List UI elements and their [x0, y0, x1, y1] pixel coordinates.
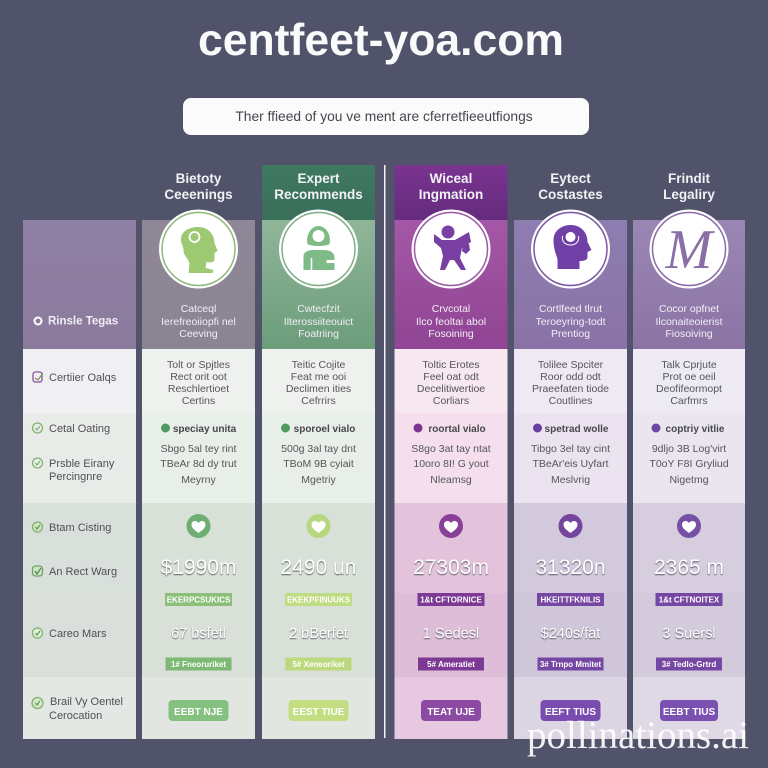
watermark: pollinations.ai: [527, 714, 749, 757]
badge: 1&t CFTORNICE: [420, 596, 482, 604]
badge: 3# Trnpo Mmitet: [540, 660, 602, 669]
row: description: Prot oe oeil: [662, 371, 716, 383]
button: EEBT NJE: [174, 707, 223, 718]
button: [288, 700, 348, 721]
header description: Fiosoiving: [665, 328, 713, 340]
label: row 2: Cetal Oating: [49, 423, 110, 435]
badge: [418, 593, 484, 606]
row: description: Declimen ities: [286, 383, 351, 395]
badge: 1# Fneoruriket: [171, 660, 226, 669]
row: description: Rect orit oot: [170, 371, 227, 383]
row: description: [532, 359, 609, 407]
price: $1990m: [161, 556, 236, 579]
icon: purple figure: [412, 210, 490, 288]
heading: Expert: [297, 171, 340, 186]
price: 2365 m: [654, 556, 724, 579]
heading: [538, 171, 603, 202]
row: details: Meslvrig: [551, 474, 590, 486]
row: description: Praeefaten tiode: [532, 383, 609, 395]
badge: [166, 658, 232, 670]
button: [540, 700, 600, 721]
heading: [419, 171, 483, 202]
button: EEFT TIUS: [545, 707, 596, 718]
button: [421, 700, 481, 721]
heading: Recommends: [274, 187, 363, 202]
column: Dietary Cleanings: [142, 171, 255, 739]
label: row 3: Percingnre: [49, 471, 102, 483]
header description: [284, 303, 353, 340]
row: status: sporoel vialo: [294, 424, 355, 435]
header description: Cwtecfzit: [297, 303, 340, 315]
row: description: [167, 359, 230, 407]
header description: Catceql: [181, 303, 216, 315]
row: description: Corliars: [433, 395, 469, 407]
row: details: Meyrny: [181, 474, 216, 486]
row: details: 9dljo 3B Log'virt: [652, 443, 726, 455]
row: details: [281, 443, 356, 486]
column: Expert Recommends: [262, 165, 375, 739]
row: description: [656, 359, 722, 407]
row: status: roortal vialo: [428, 424, 486, 435]
heading: Wiceal: [430, 171, 472, 186]
row: details: Tibgo 3el tay cint: [531, 443, 610, 455]
row: details: 500g 3al tay dnt: [281, 443, 356, 455]
value: 2 bBerfet: [289, 626, 348, 642]
row: details: TBoM 9B cyiait: [283, 458, 354, 470]
row: details: Sbgo 5al tey rint: [161, 443, 237, 455]
row: details: TBeAr 8d dy trut: [160, 458, 237, 470]
label: row 4: Btam Cisting: [49, 522, 111, 534]
icon: green head: [159, 210, 238, 288]
row: details: [531, 443, 610, 486]
row: description: Deofifeormopt: [656, 383, 722, 395]
button: EEST TIUE: [293, 707, 345, 718]
heading: Frindit: [668, 171, 710, 186]
row: description: Coutlines: [549, 395, 592, 407]
button: [168, 700, 228, 721]
badge: 5# Xeneoriket: [292, 660, 345, 669]
header description: Prentiog: [551, 328, 590, 340]
icon: script monogram: [650, 210, 728, 288]
badge: [285, 593, 352, 606]
header description: Cocor opfnet: [659, 303, 719, 315]
row: description: [286, 359, 351, 407]
row: description: Toltic Erotes: [422, 359, 480, 371]
header description: Ierefreoiiopfi nel: [161, 316, 236, 328]
column: Fritidit Logality: [633, 171, 745, 739]
row: description: Reschlertioet: [168, 383, 229, 395]
label: row 7: Cerocation: [49, 710, 102, 722]
price: 27303m: [413, 556, 489, 579]
value: 1 Sedesl: [423, 626, 479, 642]
title: centfeet-yoa.com: [198, 16, 564, 65]
badge: EKEKPFINUUKS: [287, 596, 351, 604]
row: details: 10oro 8I! G yout: [413, 458, 489, 470]
row: description: Cefrrirs: [301, 395, 336, 407]
header description: Cortlfeed tlrut: [539, 303, 602, 315]
icon: green person: [279, 210, 358, 288]
price: 31320n: [535, 556, 606, 579]
header description: Teroeyring-todt: [535, 316, 606, 328]
row: details: S8go 3at tay ntat: [411, 443, 491, 455]
row: description: Tolilee Spciter: [538, 359, 604, 371]
badge: [537, 593, 604, 606]
row: details: [649, 443, 729, 486]
header description: Ilco feoltai abol: [416, 316, 486, 328]
row: description: Tolt or Spjtles: [167, 359, 230, 371]
subtitle pill: [183, 98, 589, 135]
heading: Eytect: [550, 171, 591, 186]
icon: heart badge: [558, 514, 582, 538]
row: details: [160, 443, 237, 486]
value: $240s/fat: [541, 626, 600, 642]
row: details: Nleamsg: [430, 474, 472, 486]
icon: heart badge: [306, 514, 330, 538]
icon: heart badge: [186, 514, 210, 538]
label: row 1: Certiier Oalqs: [49, 372, 117, 384]
label: row 3: [32, 458, 115, 483]
badge: 1&t CFTNOITEX: [659, 596, 720, 604]
header description: [416, 303, 486, 340]
heading: Legaliry: [663, 187, 715, 202]
button: [660, 700, 718, 721]
heading: [164, 171, 233, 202]
heading: Ceeenings: [164, 187, 233, 202]
column: Wiceal Ingmation: [394, 165, 508, 739]
badge: [165, 593, 232, 606]
badge: [538, 658, 604, 670]
label: row 6: Careo Mars: [49, 628, 107, 640]
badge: 5# Ameratiet: [427, 660, 475, 669]
center divider: [384, 165, 386, 738]
row: description: Roor odd odt: [540, 371, 601, 383]
icon: heart badge: [439, 514, 463, 538]
row: description: Carfmrs: [670, 395, 708, 407]
icon: script monogram: M: [665, 219, 716, 281]
badge: [656, 658, 722, 670]
button: EEBT TIUS: [663, 707, 715, 718]
heading: Costastes: [538, 187, 603, 202]
header description: [161, 303, 236, 340]
badge: EKERPCSUKICS: [167, 596, 231, 604]
row: details: Nigetmg: [669, 474, 709, 486]
row: description: Decelitiwertioe: [417, 383, 485, 395]
row: details: [411, 443, 491, 486]
badge: HKEITTFKNILIS: [540, 596, 601, 604]
value: 3 Suersl: [662, 626, 716, 642]
heading: [274, 171, 363, 202]
badge: 3# Tedlo-Grtrd: [662, 660, 716, 669]
label: row 7: Brail Vy Oentel: [50, 696, 123, 708]
row: description: [417, 359, 485, 407]
icon: purple head: [531, 210, 610, 288]
header description: Fosoining: [428, 328, 474, 340]
button: TEAT UJE: [427, 707, 475, 718]
value: 67 bsfetl: [171, 626, 226, 642]
header description: Ilconaiteoierist: [655, 316, 723, 328]
header description: [655, 303, 723, 340]
row: details: TBeAr'eis Uyfart: [532, 458, 609, 470]
row: description: Feat me ooi: [291, 371, 346, 383]
column: row labels: [23, 220, 136, 739]
row: description: Feel oat odt: [423, 371, 479, 383]
label: row 3: Prsble Eirany: [49, 458, 115, 470]
row: description: Teitic Cojite: [292, 359, 346, 371]
badge: [418, 658, 484, 670]
heading: [663, 171, 715, 202]
header description: Foatriing: [298, 328, 339, 340]
header description: [535, 303, 606, 340]
heading: Ingmation: [419, 187, 483, 202]
row: description: Talk Cprjute: [661, 359, 717, 371]
row: status: spetrad wolle: [545, 424, 609, 435]
row: status: speciay unita: [173, 424, 237, 435]
row: status: coptriy vitlie: [666, 424, 725, 435]
header description: Crvcotal: [432, 303, 470, 315]
header description: Ceeving: [179, 328, 218, 340]
label: row 7: [32, 696, 123, 722]
badge: [656, 593, 722, 606]
row: details: Mgetriy: [301, 474, 336, 486]
price: 2490 un: [281, 556, 356, 579]
icon: heart badge: [677, 514, 701, 538]
badge: [286, 658, 352, 670]
column: Eytect Costastes: [514, 171, 627, 739]
row: description: Certins: [182, 395, 215, 407]
row: details: T0oY F8I Gryliud: [649, 458, 729, 470]
label: header: Rinsle Tegas: [48, 316, 118, 328]
subtitle pill: Ther ffieed of you ve ment are cferretfieeutfiongs: [235, 109, 533, 124]
label: row 5: An Rect Warg: [49, 566, 117, 578]
header description: Ilterossiiteouict: [284, 316, 353, 328]
heading: Bietoty: [176, 171, 222, 186]
